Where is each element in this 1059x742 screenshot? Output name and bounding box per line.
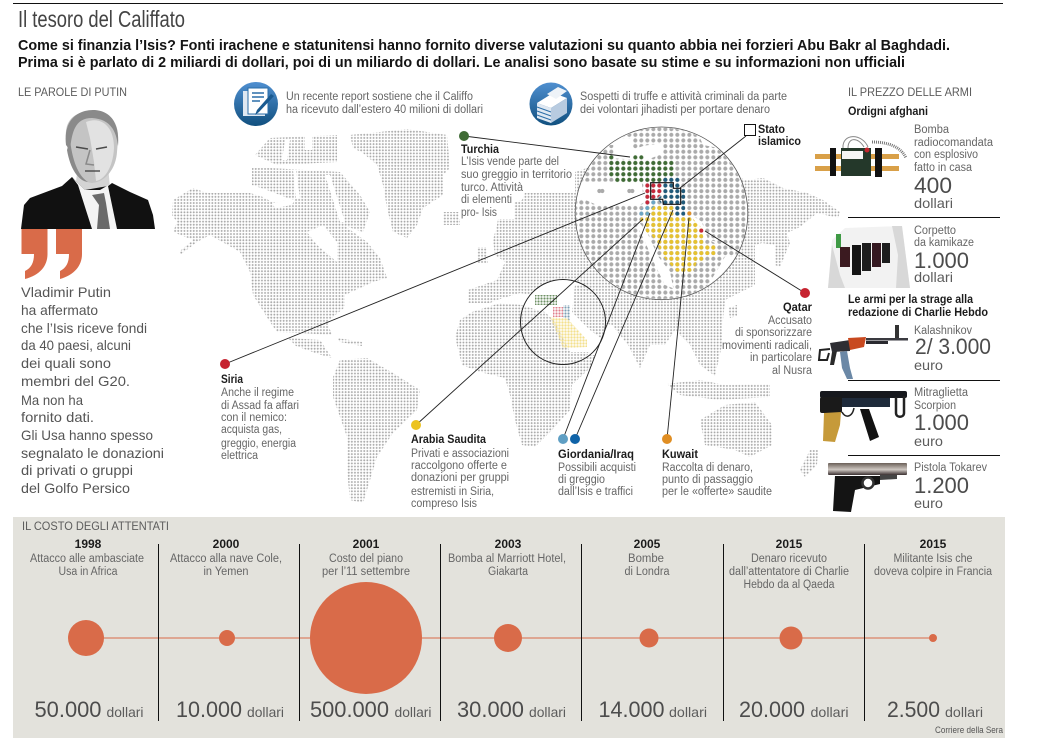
Qatar dot xyxy=(699,229,703,233)
Islamic State outline xyxy=(651,183,681,204)
callout: Qatar: movimenti radicali, xyxy=(722,340,812,352)
bomb price: 400 xyxy=(914,173,952,198)
callout: Kuwait: Raccolta di denaro, xyxy=(662,462,753,474)
intro text: Prima si è parlato di 2 miliardi di dollari, poi di un miliardo di dollari. Le analisi sono basate su stime e su informazioni non ufficiali xyxy=(18,54,905,71)
callout: Qatar: di sponsorizzare xyxy=(735,327,812,339)
callout: Qatar: Qatar xyxy=(783,302,813,314)
event 2001: 500.000 xyxy=(310,697,389,722)
event 2005: 2005 xyxy=(634,537,661,551)
event 2005: 14.000 xyxy=(598,697,664,722)
bomb price: Bomba xyxy=(914,124,950,136)
event 2000 xyxy=(170,537,284,722)
Kalashnikov price: Kalashnikov xyxy=(914,325,972,337)
callout: Siria: con il nemico: xyxy=(221,412,287,424)
callout: Siria: elettrica xyxy=(221,450,259,462)
UK and Iceland xyxy=(477,247,488,263)
event 2000: dollari xyxy=(247,704,284,720)
callout: Giordania/Iraq: di greggio xyxy=(558,474,605,486)
callout: Turchia: pro- Isis xyxy=(461,207,497,219)
bomb price: dollari xyxy=(914,195,953,211)
event 2003: Giakarta xyxy=(488,566,529,578)
callout: Arabia Saudita xyxy=(411,420,509,510)
event 2000: in Yemen xyxy=(204,566,248,578)
New Zealand xyxy=(800,450,818,477)
event 1998 xyxy=(30,537,144,722)
event 2015 Charlie Hebdo: 2015 xyxy=(776,537,803,551)
callout: Giordania/Iraq xyxy=(558,434,636,498)
Scorpion price: 1.000 xyxy=(914,410,969,435)
report note: ha ricevuto dall’estero 40 milioni di dollari xyxy=(286,104,483,116)
Saudi Arabia dots xyxy=(639,205,715,272)
callout: Giordania/Iraq: Giordania/Iraq xyxy=(558,449,634,461)
callout: Arabia Saudita: Arabia Saudita xyxy=(411,434,487,446)
Tokarev price: Pistola Tokarev xyxy=(914,462,987,474)
subheading: Charlie Hebdo: redazione di Charlie Hebdo xyxy=(848,307,988,319)
Syria dots xyxy=(645,182,662,205)
vest price: dollari xyxy=(914,269,953,285)
event 2005: dollari xyxy=(669,704,707,720)
callout: Kuwait: Kuwait xyxy=(662,449,698,461)
event 1998: 50.000 xyxy=(34,697,102,722)
Central America xyxy=(288,338,332,358)
event 2001 xyxy=(310,537,432,722)
callout: Turchia: di elementi xyxy=(461,194,512,206)
callout: Kuwait: per le «offerte» saudite xyxy=(662,486,772,498)
panel heading: IL COSTO DEGLI ATTENTATI xyxy=(22,519,169,533)
bomb price: con esplosivo xyxy=(914,149,978,161)
event 2003: Bomba al Marriott Hotel, xyxy=(448,553,566,565)
icon: suicide vest xyxy=(828,226,910,288)
Putin quote: fornito dati. xyxy=(21,409,94,425)
callout: Qatar: Accusato xyxy=(768,315,812,327)
Putin quote: che l’Isis riceve fondi xyxy=(21,320,147,336)
North America xyxy=(172,168,387,335)
Australia xyxy=(700,402,772,457)
section heading: le parole di Putin: LE PAROLE DI PUTIN xyxy=(18,85,127,99)
Kalashnikov price: euro xyxy=(914,357,943,373)
event 2015 Charlie Hebdo: dall’attentatore di Charlie xyxy=(729,566,849,578)
event 2001: 2001 xyxy=(353,537,380,551)
Scorpion price: Scorpion xyxy=(914,400,956,412)
callout: Arabia Saudita: Privati e associazioni xyxy=(411,448,509,460)
callout: Turchia xyxy=(459,131,572,219)
Putin quote: dei quali sono xyxy=(21,355,111,371)
Putin quote: di privati o gruppi xyxy=(21,462,133,478)
vest price: 1.000 xyxy=(914,248,969,273)
report note xyxy=(286,91,483,116)
callout: Arabia Saudita: compreso Isis xyxy=(411,498,477,510)
callout: Turchia: L’Isis vende parte del xyxy=(461,156,559,168)
callout: Qatar: in particolare xyxy=(750,352,812,364)
Philippines xyxy=(728,305,737,318)
South America xyxy=(333,358,420,503)
event 1998: Attacco alle ambasciate xyxy=(30,553,144,565)
event 1998: dollari xyxy=(106,704,144,720)
Putin quote: ha affermato xyxy=(21,302,98,318)
event 2015 Charlie Hebdo xyxy=(729,537,849,722)
callout: Stato islamico xyxy=(744,124,801,148)
event 2015 Charlie Hebdo: 20.000 xyxy=(739,697,805,722)
fraud note: dei volontari jihadisti per portare denaro xyxy=(580,104,770,116)
callout: Siria: di Assad fa affari xyxy=(221,400,299,412)
callout: Siria: Siria xyxy=(221,374,244,386)
event 2000: 2000 xyxy=(213,537,240,551)
Africa xyxy=(455,303,595,447)
Putin quote: del Golfo Persico xyxy=(21,480,130,496)
callout: Turchia: suo greggio in territorio xyxy=(461,169,572,181)
bomb price: fatto in casa xyxy=(914,162,973,174)
callout: Turchia: turco. Attività xyxy=(461,182,524,194)
event 2003 xyxy=(448,537,566,722)
Scorpion price: Mitraglietta xyxy=(914,387,969,399)
Putin quote: Ma non ha xyxy=(21,392,83,408)
event 2015 Charlie Hebdo: dollari xyxy=(810,704,848,720)
section heading: il prezzo delle armi: IL PREZZO DELLE ARMI xyxy=(848,85,972,99)
Scorpion price: euro xyxy=(914,433,943,449)
Kalashnikov price: 2/ 3.000 xyxy=(915,334,991,359)
event 2005: di Londra xyxy=(624,566,670,578)
white mask behind Turchia text xyxy=(459,145,575,193)
callout: Giordania/Iraq: Possibili acquisti xyxy=(558,462,636,474)
world map xyxy=(172,129,840,503)
event 2005 xyxy=(598,537,707,722)
event 2015 France: 2.500 xyxy=(887,697,940,722)
Jordan dots xyxy=(639,200,656,216)
icon: Tokarev pistol xyxy=(828,463,907,512)
callout: Arabia Saudita: donazioni per gruppi xyxy=(411,472,509,484)
bomb price: radiocomandata xyxy=(914,137,994,149)
bomb price xyxy=(914,124,994,211)
callout: Arabia Saudita: estremisti in Siria, xyxy=(411,486,494,498)
title: Il tesoro del Califfato xyxy=(18,6,185,32)
event 2015 Charlie Hebdo: Denaro ricevuto xyxy=(751,553,827,565)
callout: Siria: Anche il regime xyxy=(221,387,294,399)
Putin quote xyxy=(21,284,164,496)
icon: Kalashnikov xyxy=(819,325,908,379)
callout: Stato islamico: Stato xyxy=(758,124,785,136)
Arctic islands xyxy=(255,135,337,165)
intro text xyxy=(18,37,950,71)
Iraq dots xyxy=(657,177,685,216)
callout: Qatar xyxy=(722,288,813,377)
callout: Kuwait xyxy=(662,434,772,498)
fraud note: Sospetti di truffe e attività criminali da parte xyxy=(580,91,787,103)
event 2003: 30.000 xyxy=(457,697,524,722)
callout: Turchia: Turchia xyxy=(461,144,500,156)
event 2001: Costo del piano xyxy=(329,553,403,565)
event 2015 Charlie Hebdo: Hebdo da al Qaeda xyxy=(744,579,835,591)
report note: Un recente report sostiene che il Califfo xyxy=(286,91,473,103)
callout: Siria: acquista gas, xyxy=(221,424,282,436)
callout: Siria: greggio, energia xyxy=(221,438,297,450)
vest price xyxy=(914,225,974,285)
callout: Qatar: al Nusra xyxy=(772,365,813,377)
subheading: Charlie Hebdo: Le armi per la strage alla xyxy=(848,294,974,306)
Putin quote: Vladimir Putin xyxy=(21,284,111,300)
Kalashnikov price xyxy=(914,325,991,373)
event 1998: Usa in Africa xyxy=(58,566,118,578)
callout: Stato islamico: islamico xyxy=(758,136,801,148)
icon: stacks of money xyxy=(530,82,572,126)
Europe and Asia xyxy=(468,150,840,376)
Turkey dots xyxy=(609,155,674,182)
panel: il costo degli attentati xyxy=(13,517,1005,738)
big magnifier circle xyxy=(570,125,750,302)
event 1998: 1998 xyxy=(75,537,102,551)
event 2015 France: dollari xyxy=(945,704,983,720)
Putin quote: Gli Usa hanno spesso xyxy=(21,427,153,443)
Scorpion price xyxy=(914,387,969,449)
event 2015 France: Militante Isis che xyxy=(894,553,972,565)
Putin quote: membri del G20. xyxy=(21,373,130,389)
event 2003: 2003 xyxy=(495,537,522,551)
intro text: Come si finanzia l’Isis? Fonti irachene e statunitensi hanno fornito diverse valutazioni su quanto abbia nei forzieri Abu Bakr al Baghdadi. xyxy=(18,37,950,54)
credit: Corriere della Sera xyxy=(935,725,1003,735)
event 2001: per l’11 settembre xyxy=(322,566,410,578)
small locator circle xyxy=(520,279,606,365)
Putin quote: da 40 paesi, alcuni xyxy=(21,337,131,353)
fraud note xyxy=(580,91,787,116)
icon: Scorpion xyxy=(820,391,907,442)
event 2015 France xyxy=(874,537,993,722)
Greenland xyxy=(350,129,450,238)
top rule xyxy=(13,3,1003,4)
event 2005: Bombe xyxy=(628,553,664,565)
portrait of Putin xyxy=(21,110,155,229)
timeline line xyxy=(86,638,933,639)
event 2001: dollari xyxy=(394,704,432,720)
leader lines xyxy=(225,136,805,439)
subheading: ordigni afghani: Ordigni afghani xyxy=(848,106,928,118)
event 2003: dollari xyxy=(529,704,566,720)
Kuwait dots xyxy=(687,211,691,215)
Tokarev price xyxy=(914,462,987,511)
event 2000: Attacco alla nave Cole, xyxy=(170,553,282,565)
callout: Siria xyxy=(220,359,299,462)
vest price: Corpetto xyxy=(914,225,956,237)
event 2015 France: doveva colpire in Francia xyxy=(874,566,993,578)
event 2015 France: 2015 xyxy=(920,537,947,551)
icon: remote bomb xyxy=(815,137,906,177)
callout: Giordania/Iraq: dall’Isis e traffici xyxy=(558,486,633,498)
callout: Kuwait: punto di passaggio xyxy=(662,474,753,486)
Tokarev price: euro xyxy=(914,495,943,511)
callout: Arabia Saudita: raccolgono offerte e xyxy=(411,460,507,472)
Indonesia xyxy=(667,380,770,400)
subheading: Charlie Hebdo xyxy=(848,294,988,319)
event 2000: 10.000 xyxy=(176,697,242,722)
Tokarev price: 1.200 xyxy=(914,473,969,498)
Putin quote: segnalato le donazioni xyxy=(21,445,164,461)
quotation marks xyxy=(22,229,82,279)
vest price: da kamikaze xyxy=(914,237,974,249)
icon: document and pen xyxy=(234,82,278,126)
